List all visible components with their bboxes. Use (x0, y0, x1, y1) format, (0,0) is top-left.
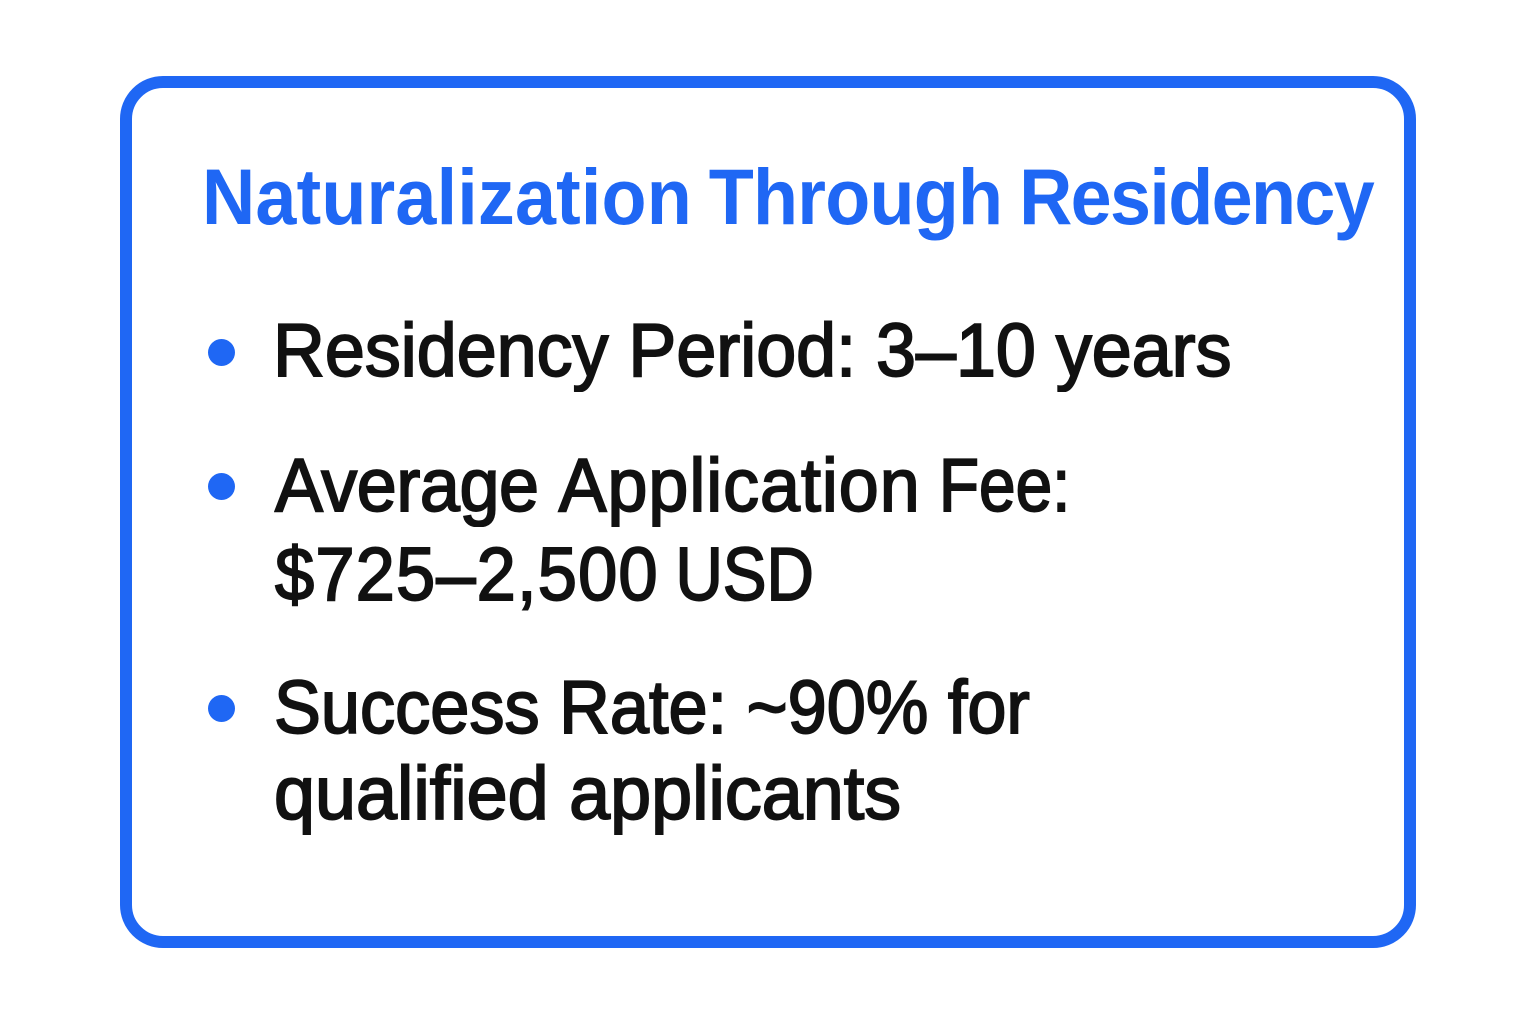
text: application fee: Fee: (939, 443, 1070, 527)
text: success rate: Success Rate: ~90% for (274, 665, 1030, 749)
text: application fee: USD (676, 532, 814, 616)
text: success rate (274, 665, 1030, 835)
text: application fee: $725–2,500 (275, 532, 659, 616)
bullet list (208, 308, 1232, 835)
bullet icon: residency period (208, 338, 235, 366)
title: Naturalization Through Residency (202, 152, 1373, 241)
bullet icon: success rate (208, 695, 235, 722)
text: application fee (274, 443, 1070, 616)
text: residency period: Residency Period: 3–10 years (273, 308, 1232, 392)
panel: card with blue border (120, 76, 1416, 948)
text: success rate: qualified applicants (274, 751, 901, 835)
bullet icon: application fee (208, 472, 235, 500)
text: application fee: Average Application (275, 443, 921, 527)
